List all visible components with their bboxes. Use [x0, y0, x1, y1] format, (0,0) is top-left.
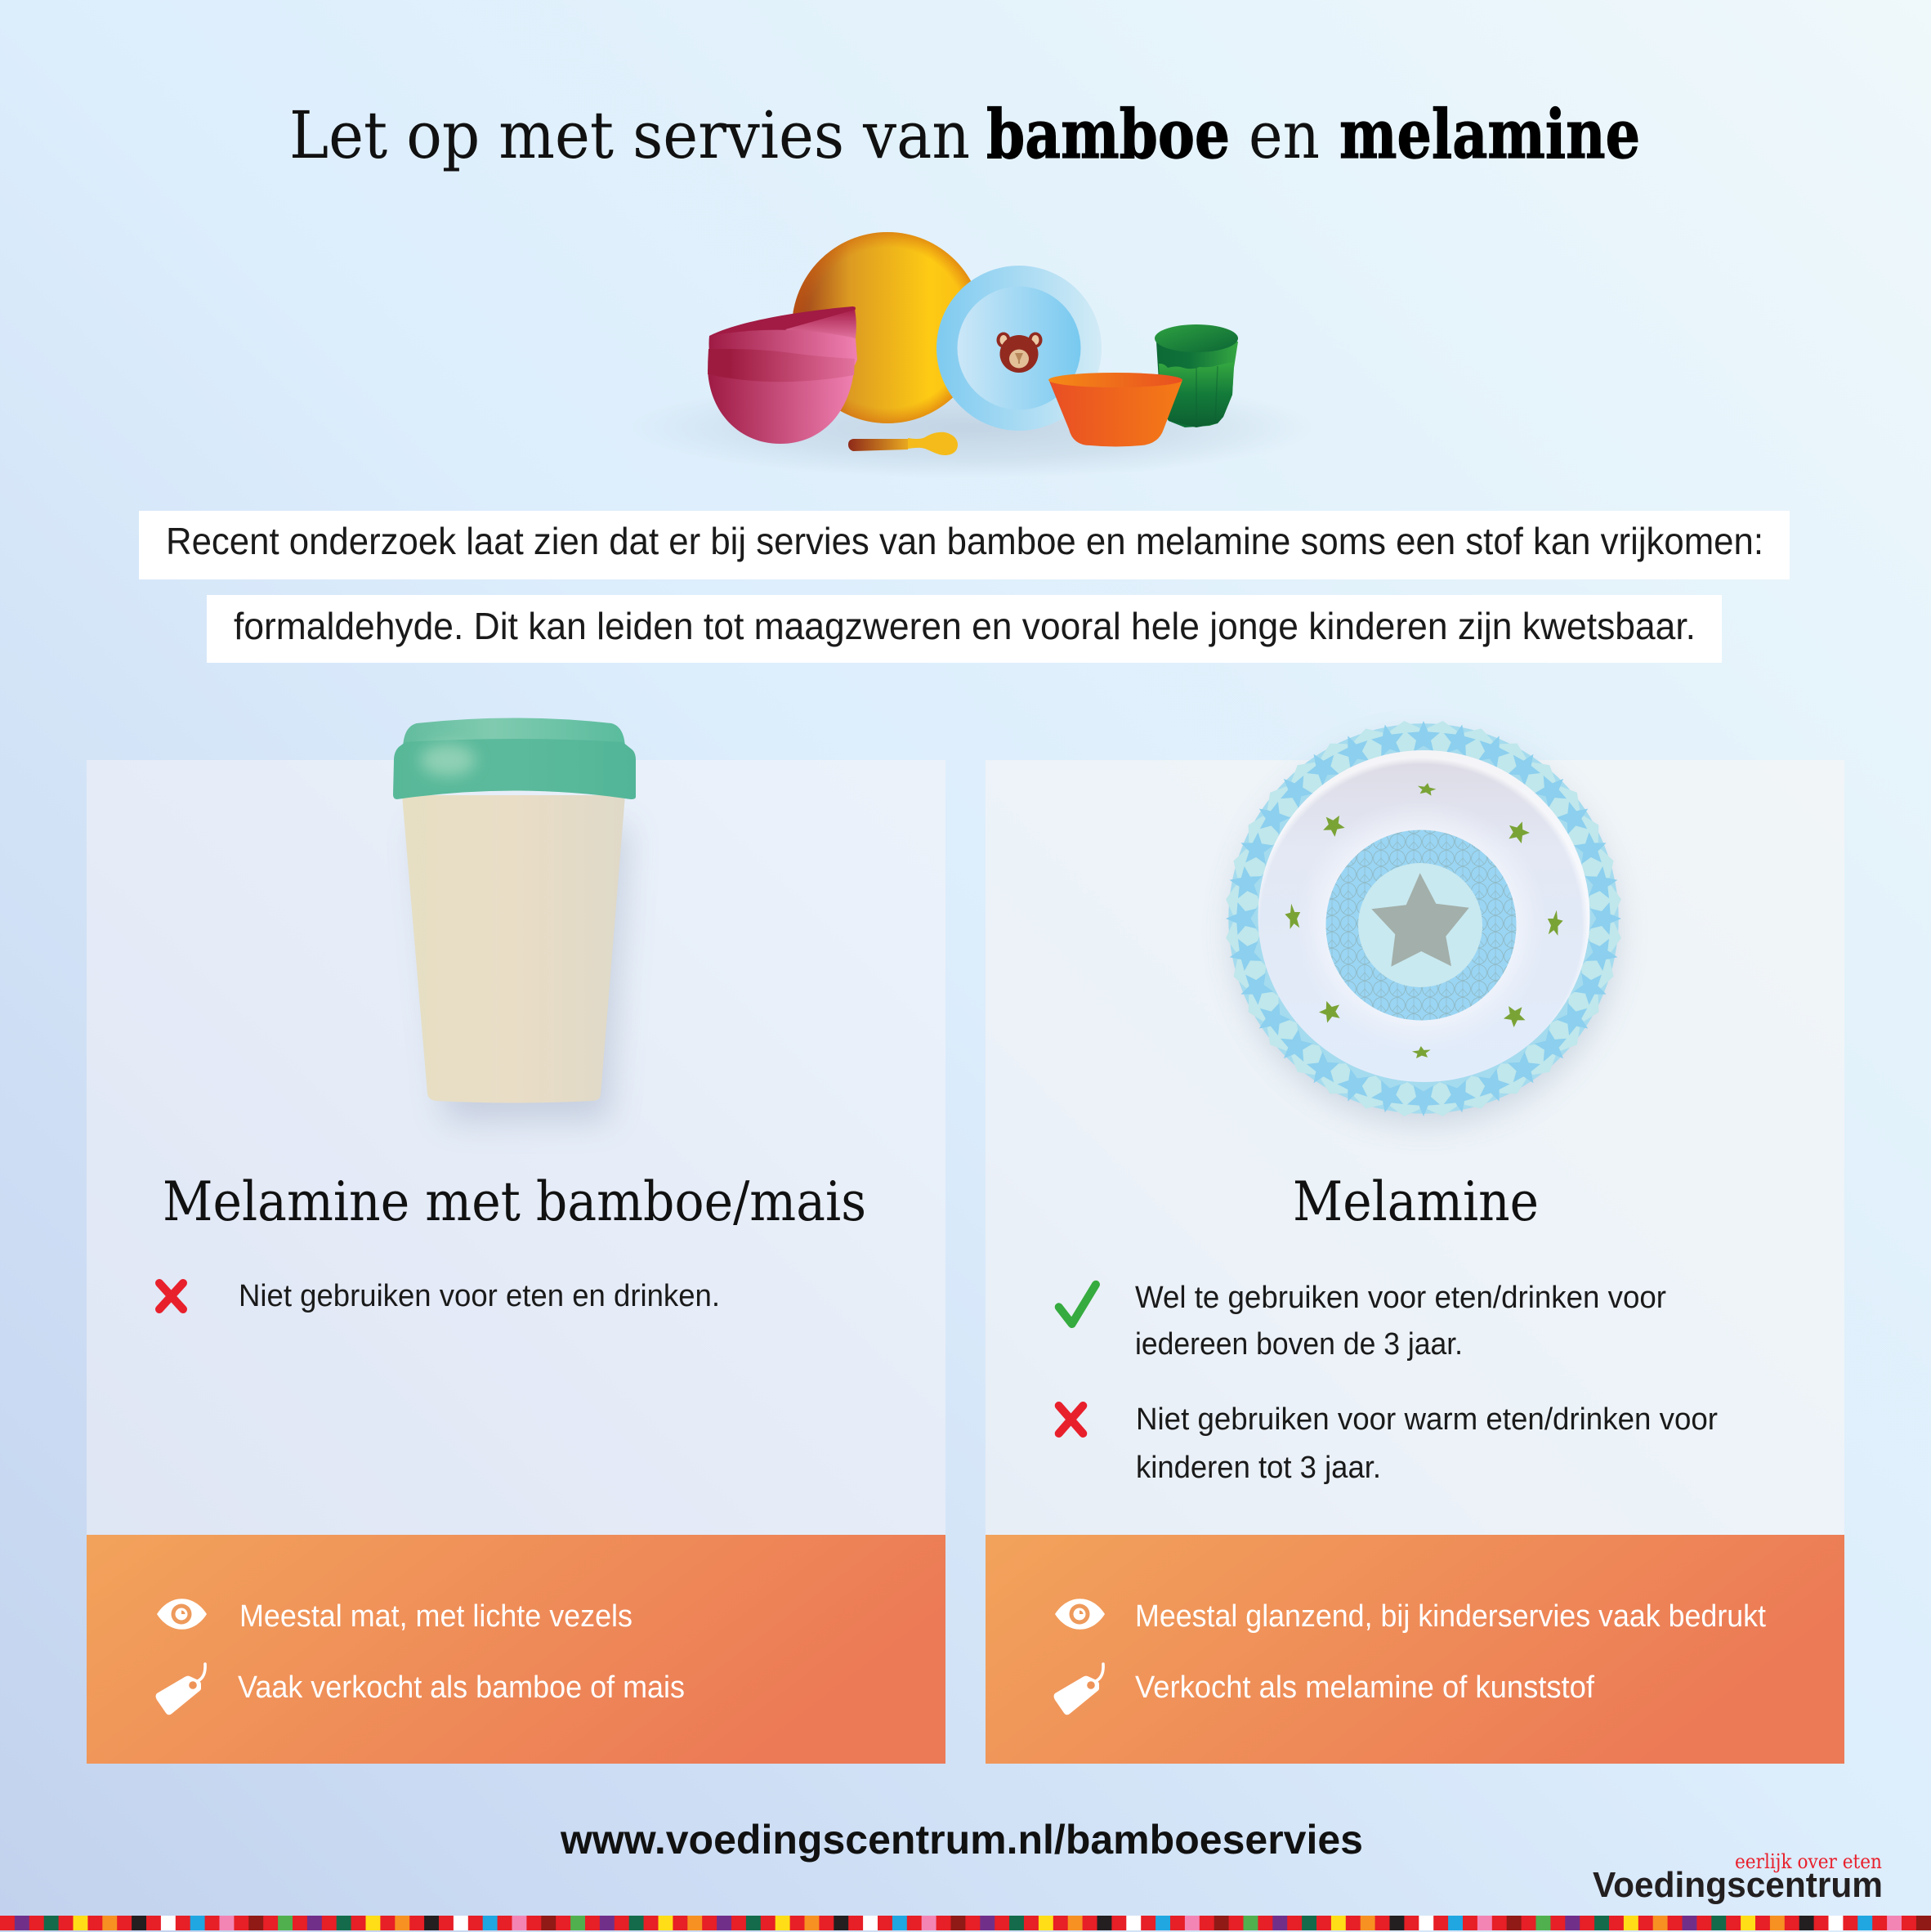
rule text: Niet gebruiken voor eten en drinken.	[239, 1279, 720, 1313]
sales description: Vaak verkocht als bamboe of mais	[238, 1670, 685, 1705]
intro text line 1	[139, 511, 1790, 579]
logo: Voedingscentrum: eerlijk over eten	[1735, 1850, 1882, 1873]
intro text line 2: formaldehyde. Dit kan leiden tot maagzweren en vooral hele jonge kinderen zijn kwetsbaar.	[234, 605, 1696, 647]
icon: eye	[157, 1599, 207, 1630]
heading: Melamine met bamboe/mais	[163, 1170, 866, 1233]
orange info band right	[986, 1535, 1844, 1764]
sales description: Verkocht als melamine of kunststof	[1135, 1670, 1594, 1705]
panel background right	[986, 760, 1844, 1535]
icon: bamboo cup	[393, 718, 636, 1121]
centre disc	[1358, 863, 1482, 987]
logo: Voedingscentrum: Voedingscentrum	[1593, 1865, 1883, 1905]
colour strip	[0, 1916, 1931, 1930]
check icon	[1059, 1285, 1096, 1324]
orange info band left	[87, 1535, 945, 1764]
pink stacked bowls	[708, 306, 857, 444]
title: bamboe	[986, 96, 1230, 174]
look description: Meestal mat, met lichte vezels	[239, 1599, 632, 1634]
grey star	[1371, 873, 1469, 967]
bowl interior	[1258, 750, 1590, 1082]
bowl base with peace pattern	[1325, 830, 1517, 1020]
cross icon	[159, 1283, 183, 1309]
website url: www.voedingscentrum.nl/bamboeservies	[560, 1817, 1363, 1863]
cross icon	[1059, 1406, 1083, 1433]
icon: eye	[1055, 1599, 1105, 1630]
yellow plate	[792, 232, 983, 423]
illustration: tableware group	[629, 232, 1316, 478]
intro text line 1: Recent onderzoek laat zien dat er bij servies van bamboe en melamine soms een stof kan vrijkomen:	[166, 520, 1763, 562]
icon: melamine bowl	[1224, 719, 1623, 1123]
rim	[1224, 719, 1623, 1118]
title: en	[1249, 97, 1320, 173]
spoon	[848, 432, 958, 455]
rule text: not allowed	[1136, 1402, 1718, 1485]
look description: Meestal glanzend, bij kinderservies vaak bedrukt	[1135, 1599, 1766, 1634]
title: melamine	[1339, 96, 1640, 174]
rule text: not allowed: Niet gebruiken voor warm eten/drinken voor	[1136, 1402, 1718, 1437]
icon: price tag	[155, 1664, 205, 1715]
rule text: allowed: iedereen boven de 3 jaar.	[1135, 1327, 1463, 1362]
panel: melamine met bamboe/mais	[87, 718, 945, 1764]
rule text: allowed: Wel te gebruiken voor eten/drinken voor	[1135, 1281, 1666, 1315]
green cup	[1155, 324, 1238, 427]
panel background left	[87, 760, 945, 1535]
small green stars	[1284, 781, 1564, 1058]
title	[289, 96, 1640, 174]
blue plate with bear	[936, 266, 1102, 431]
rule text: not allowed: kinderen tot 3 jaar.	[1136, 1451, 1381, 1485]
intro text line 2	[207, 595, 1722, 663]
rule text: allowed	[1135, 1281, 1666, 1362]
icon: price tag	[1054, 1664, 1103, 1715]
title: Let op met servies van	[289, 97, 970, 173]
panel: melamine	[986, 719, 1844, 1764]
heading: Melamine	[1293, 1170, 1539, 1233]
orange bowl	[1048, 373, 1182, 446]
ground shadow	[629, 377, 1316, 478]
